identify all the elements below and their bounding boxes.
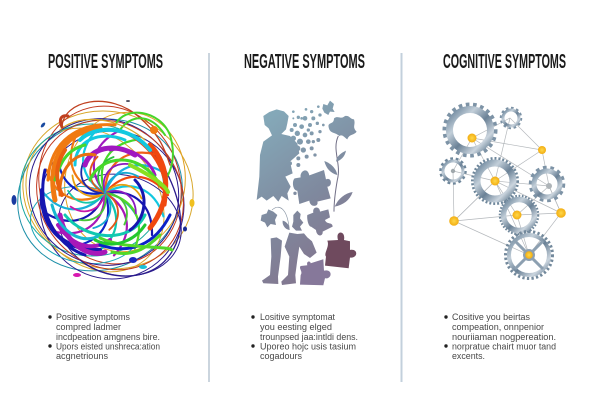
panel: negative symptoms	[244, 51, 365, 361]
bullet list: excents.	[452, 351, 485, 361]
droplets	[12, 100, 194, 277]
puzzle piece dark	[325, 232, 356, 268]
puzzle piece large	[293, 170, 331, 206]
gear small left	[440, 158, 466, 184]
gear lower middle	[500, 196, 538, 234]
chart: tangled scribble	[0, 86, 215, 300]
bullet list: nouriiaman nogpereation.	[452, 332, 556, 342]
heading: positive symptoms: POSITIVE SYMPTOMS	[48, 51, 163, 73]
bullet list: compeation, onnpenior	[452, 322, 544, 332]
bullet list: Cositive you beirtas	[452, 312, 530, 322]
bullet list: Positive symptoms	[56, 312, 130, 322]
legs and cracked piece	[262, 233, 317, 285]
particles	[288, 105, 325, 195]
gear large top	[445, 105, 495, 155]
gear small top	[501, 108, 521, 128]
figure torso	[257, 109, 299, 202]
bullet list: Lositive symptomat	[260, 312, 335, 322]
bullet list: compred ladmer	[56, 322, 121, 332]
divider left	[208, 53, 210, 382]
bullet list	[444, 312, 556, 361]
gear right	[530, 168, 564, 200]
bullet list: Upors eisted unshreca:ation	[56, 342, 160, 352]
panel: cognitive symptoms	[440, 51, 566, 361]
puzzle piece lower	[300, 259, 331, 285]
connecting lines	[453, 118, 561, 255]
wilted flower	[261, 207, 303, 231]
flower and stem	[324, 116, 357, 212]
divider right	[400, 53, 402, 382]
bullet list: you eesting elged	[260, 322, 332, 332]
puzzle piece medium	[307, 208, 333, 235]
bullet list	[48, 312, 160, 361]
gear spoked bottom	[506, 232, 552, 278]
illustration: fragmenting figure	[257, 101, 357, 285]
panel: positive symptoms	[0, 51, 215, 361]
heading: negative symptoms: NEGATIVE SYMPTOMS	[244, 51, 365, 73]
bullet list: incdpeation amgnens bire.	[56, 332, 160, 342]
bullet list	[251, 312, 358, 361]
bullet list: norpratue chairt muor tand	[452, 342, 556, 352]
bullet list: acgnetriouns	[56, 351, 108, 361]
puzzle piece top	[322, 101, 335, 115]
bullet list: cogadours	[260, 351, 302, 361]
bullet list: trounpsed jaa:intldi dens.	[260, 332, 358, 342]
nodes	[449, 134, 566, 259]
bullet list: Uporeo hojc usis tasium	[260, 342, 356, 352]
gear centre	[472, 158, 518, 204]
network of gears	[440, 105, 566, 278]
pinwheel core	[40, 128, 170, 258]
